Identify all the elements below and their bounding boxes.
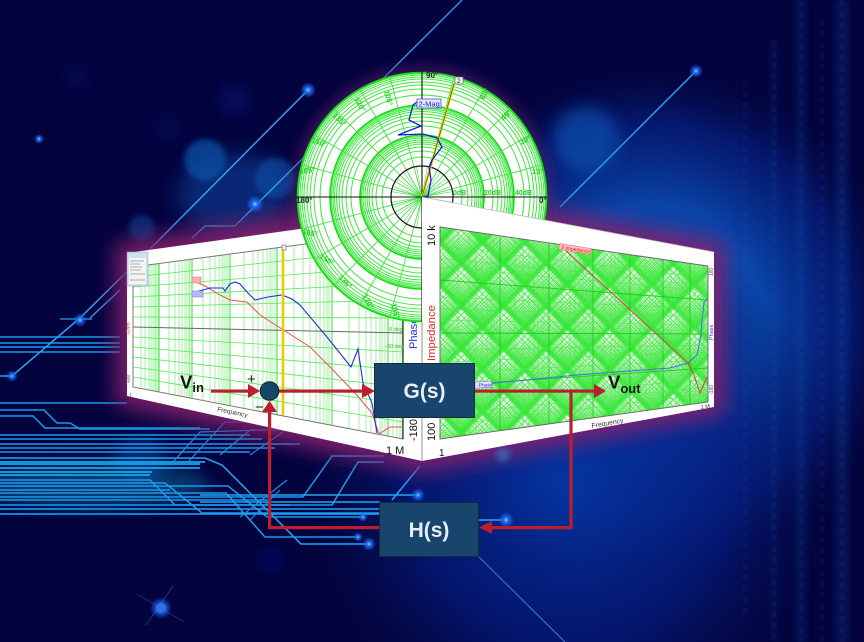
polar axis labels: 90° [426,71,438,80]
polar angle labels: 150° [310,135,328,149]
left chart axis labels [126,318,420,457]
right chart axis labels: Impedance [426,305,438,361]
right chart axis labels: 10 k [426,225,438,246]
summing junction [260,382,279,400]
glow: purple halo around the charts [127,197,714,461]
left chart axis labels: 1 [129,393,132,399]
polar angle labels: 30° [518,134,532,147]
polar angle labels: 45° [499,108,513,122]
right chart frame [440,227,708,439]
polar angle labels: 135° [337,273,354,290]
polar rings [298,72,546,322]
cursor: yellow marker [282,245,286,415]
right chart axis labels [426,225,715,459]
circuit traces: left bundle [0,337,506,544]
polar angle labels: 135° [331,111,348,128]
right chart axis labels: Phase [709,324,715,340]
block: G(s) [374,364,474,418]
right chart tag: phase: -Phase [477,382,493,389]
polar axis labels: 0° [539,196,547,205]
left chart axis labels: 400 [126,374,132,383]
label: Vin: in [192,380,204,395]
polar cursor [422,77,463,197]
left chart axis labels: Phase [408,318,420,349]
plus sign: + [247,371,256,388]
polar angle labels: 105° [382,89,395,107]
sparkle points [6,64,703,625]
block: H(s): H(s) [409,519,449,542]
polar angle labels: 40dB [515,190,532,197]
left chart curve: magnitude [192,280,403,434]
polar angle labels: 120° [352,96,368,113]
panel: polar chart [296,71,547,322]
left chart axis labels: Frequency [217,406,249,419]
right chart axis labels: 180 [709,267,715,276]
small cursor window [127,252,148,286]
polar axis labels: 180° [296,196,313,205]
right chart axis labels: Frequency [591,417,625,430]
polar angle labels: 150° [318,252,336,267]
arrow: output feedback to H(s) [479,391,573,534]
arrow: H(s) back to junction [262,401,380,529]
polar angle labels [299,87,543,320]
polar angle labels: 60° [478,87,491,101]
left chart axis labels: -30 deg [385,344,404,350]
left chart frame [133,231,403,439]
left chart grid [134,244,402,438]
right chart axis labels: 1 [439,448,445,459]
right chart curve: impedance [565,250,707,393]
polar axis labels [296,71,547,205]
right chart curve: phase [475,299,707,385]
polar angle labels: 105° [389,302,402,320]
right chart axis labels: 1 M [700,404,711,411]
glow: dim halo around the polar chart [294,69,550,325]
left chart curve: phase [192,282,377,433]
polar angle labels: 165° [302,227,318,239]
minus sign: − [255,399,264,416]
left chart curve tags [192,277,203,297]
block: H(s) [380,502,478,556]
label: Vin: V [180,372,192,392]
polar tag: 2-Mag: 2-Mag [418,100,440,108]
right chart tag: impedance: 2-Impedance [561,245,591,255]
polar cursor: 2 [457,78,461,85]
label: Vout: out [620,381,641,396]
polar angle labels: 15° [532,167,543,176]
left chart axis labels: -Ohm [126,322,132,335]
block: G(s): G(s) [404,380,446,403]
label: Vout: V [608,372,620,392]
polar angle labels: 165° [299,165,316,176]
left chart axis labels: 0 deg [389,327,403,333]
polar angle labels: 0dB [453,190,466,197]
left chart axis labels: -180 [408,419,420,441]
polar axes [296,71,547,322]
arrow: G(s) to Vout [475,384,606,398]
polar angle labels: 120° [360,292,376,310]
arrow: junction to G(s) [279,384,375,398]
panel: right impedance chart [422,197,715,461]
left chart axis labels: 1 M [386,445,404,457]
polar angle labels: 20dB [484,190,501,197]
arrow: Vin to summing junction [211,384,260,398]
right chart hatch grid [440,220,710,442]
right chart axis labels: 100 [426,423,438,441]
panel: left Bode chart [126,228,422,461]
right chart axis labels: -180 [709,385,715,395]
polar spokes [301,76,543,318]
polar curve [398,102,442,197]
polar 0 dB ring [391,166,453,228]
